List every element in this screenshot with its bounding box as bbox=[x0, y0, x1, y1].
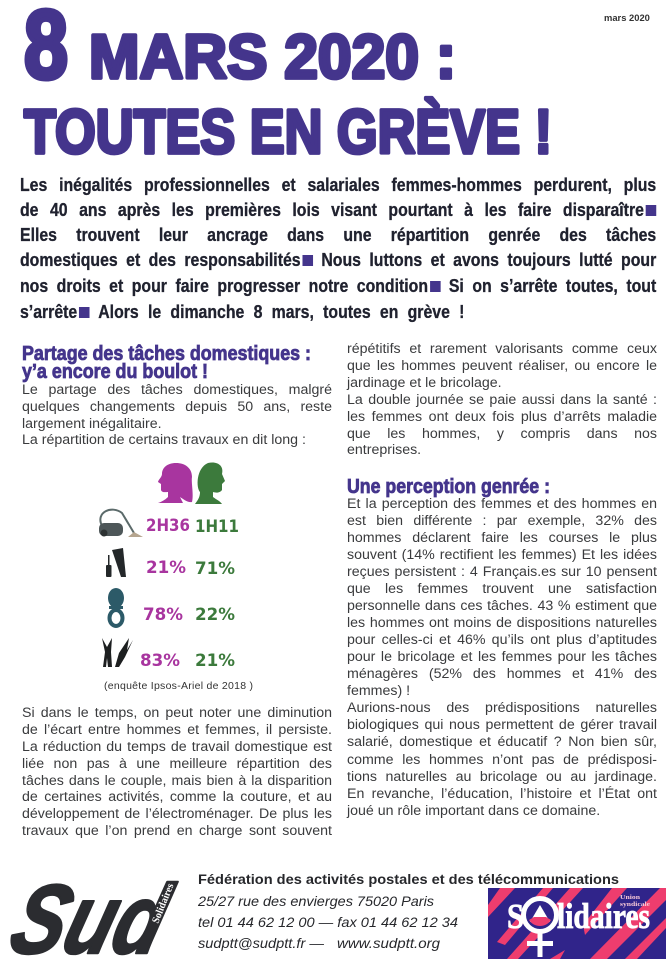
footer: federation contact: tel 01 44 62 12 00 — fax 01 44 62 12 34 bbox=[198, 914, 458, 930]
caption: (enquête Ipsos-Ariel de 2018 ) bbox=[104, 680, 253, 692]
title: MARS 2020 : bbox=[89, 23, 456, 92]
icon: male head bbox=[195, 463, 225, 504]
text block: partage intro: largement inégalitaire. bbox=[22, 416, 162, 432]
text block: une perception genrée: comme les hommes n’ont pas de prédisposi- bbox=[347, 752, 657, 768]
text block: une perception genrée: souvent (14% rectifient les femmes) Et les idées bbox=[347, 547, 657, 563]
text block: une perception genrée: personnelle dans ces tâches. 43 % estiment que bbox=[347, 598, 657, 614]
title bbox=[23, 0, 552, 167]
text block: une perception genrée: pour le bricolage et les femmes pour les tâches bbox=[347, 649, 657, 665]
text block: si dans le temps bbox=[22, 705, 332, 839]
footer: federation contact: www.sudptt.org bbox=[337, 935, 440, 951]
text block: partage intro: La répartition de certains travaux en dit long : bbox=[22, 432, 306, 448]
logo: Solidaires: Union bbox=[620, 894, 640, 901]
row: toilet cleaning values bbox=[143, 605, 235, 624]
text block: si dans le temps: de l’écart entre hommes et femmes, il persiste. bbox=[22, 722, 332, 738]
row: toilet cleaning values: 22% bbox=[195, 605, 235, 624]
row: diy values: 71% bbox=[195, 559, 235, 578]
text block: suite colonne droite: les femmes ont deux fois plus d’arrêts maladie bbox=[347, 409, 657, 425]
text block: une perception genrée: reçues persistent : 4 Français.es sur 10 pensent bbox=[347, 564, 657, 580]
text block: suite colonne droite: que les hommes, y compris dans nos bbox=[347, 426, 657, 442]
text block: suite colonne droite: entreprises. bbox=[347, 442, 421, 458]
logo: Sud: Solidaires bbox=[151, 882, 177, 925]
text block: partage intro: Le partage des tâches domestiques, malgré bbox=[22, 382, 332, 398]
footer: federation contact: 25/27 rue des envierges 75020 Paris bbox=[197, 893, 434, 909]
intro paragraph bbox=[20, 175, 656, 322]
row: laundry values: 83% bbox=[140, 651, 180, 670]
heading: partage des tâches: Partage des tâches domestiques : bbox=[22, 342, 311, 365]
text block: une perception genrée: En revanche, l’éducation, l’histoire et l’État ont bbox=[347, 786, 657, 802]
text block: une perception genrée: pour celles-ci et 46% qu’ils ont plus d’aptitudes bbox=[347, 632, 657, 648]
text block: une perception genrée: Et la perception des femmes et des hommes en bbox=[347, 496, 657, 512]
logo: Solidaires: syndicale bbox=[620, 901, 650, 908]
text block: suite colonne droite: La double journée se paie aussi dans la santé : bbox=[347, 392, 657, 408]
intro paragraph: nos droits et pour faire progresser notre condition Si on s’arrête toutes, tout bbox=[20, 276, 656, 296]
text block: une perception genrée: ménagères (52% des hommes et 41% des bbox=[347, 666, 657, 682]
row: diy values bbox=[146, 558, 235, 578]
row: vacuuming values bbox=[146, 516, 239, 536]
text block: suite colonne droite: que les hommes peuvent réaliser, ou encore le bbox=[347, 358, 657, 374]
text block: une perception genrée: salarié, domestique et éducatif ? Non bien sûr, bbox=[347, 734, 657, 750]
logo: Solidaires: S bbox=[507, 897, 524, 936]
title: TOUTES EN GRÈVE ! bbox=[24, 98, 552, 167]
intro paragraph: Les inégalités professionnelles et salariales femmes-hommes perdurent, plus bbox=[20, 175, 656, 195]
text block: une perception genrée: les hommes ont moins de dispositions naturelles bbox=[347, 615, 657, 631]
row: vacuuming values: 2H36 bbox=[146, 516, 190, 535]
icon: saw and screwdriver bbox=[106, 548, 126, 577]
text block: une perception genrée: est bien différente : par exemple, 32% des bbox=[347, 513, 657, 529]
row: toilet cleaning values: 78% bbox=[143, 605, 183, 624]
text block: suite colonne droite: répétitifs et rarement valorisants comme ceux bbox=[347, 341, 657, 357]
text block: si dans le temps: liée non pas à une meilleure répartition des bbox=[22, 756, 332, 772]
icon: clothes pegs bbox=[102, 638, 133, 667]
footer: federation contact: Fédération des activités postales et des télécommunications bbox=[198, 872, 619, 887]
icon: female head bbox=[158, 463, 193, 503]
text block: si dans le temps: de certaines activités, comme la couture, et au bbox=[22, 789, 332, 805]
text block: si dans le temps: travaux que l’on prend en charge sont souvent bbox=[22, 823, 332, 839]
heading: partage des tâches bbox=[22, 342, 311, 383]
text block: si dans le temps: Si dans le temps, on peut noter une diminution bbox=[22, 705, 332, 721]
row: laundry values: 21% bbox=[195, 651, 235, 670]
text block: suite colonne droite bbox=[346, 341, 657, 458]
date label: mars 2020 bbox=[604, 12, 650, 23]
icon: toilet seat bbox=[108, 588, 124, 626]
logo: Solidaires: lidaires bbox=[557, 896, 650, 936]
infographic: household tasks bbox=[99, 462, 253, 692]
intro paragraph: domestiques et des responsabilités Nous luttons et avons toujours lutté pour bbox=[20, 250, 656, 270]
intro paragraph: de 40 ans après les premières lois visant pourtant à les faire disparaître bbox=[20, 200, 644, 220]
logo: Solidaires bbox=[488, 888, 666, 959]
intro paragraph: Elles trouvent leur ancrage dans une répartition genrée des tâches bbox=[20, 225, 656, 245]
heading: une perception genrée: Une perception genrée : bbox=[347, 475, 550, 498]
text block: une perception genrée: Aurions-nous des prédispositions naturelles bbox=[347, 700, 657, 716]
text block: une perception genrée: tions naturelles au bricolage ou au jardinage. bbox=[347, 769, 657, 785]
text block: une perception genrée: biologiques qui nous permettent de gérer travail bbox=[347, 717, 657, 733]
text block: une perception genrée bbox=[346, 496, 657, 819]
row: laundry values bbox=[140, 651, 235, 670]
heading: partage des tâches: y’a encore du boulot ! bbox=[22, 360, 208, 383]
text block: une perception genrée: femmes) ! bbox=[347, 683, 410, 699]
footer: federation contact bbox=[197, 872, 619, 951]
intro paragraph: s’arrête Alors le dimanche 8 mars, toutes en grève ! bbox=[20, 302, 464, 322]
footer: federation contact: sudptt@sudptt.fr — bbox=[198, 935, 325, 951]
text block: une perception genrée: hommes déclarent faire les courses le plus bbox=[347, 530, 657, 546]
text block: si dans le temps: La réduction du temps de travail domestique est bbox=[22, 739, 332, 755]
text block: suite colonne droite: jardinage et le bricolage. bbox=[347, 375, 502, 391]
text block: une perception genrée: joué un rôle important dans ce domaine. bbox=[347, 803, 600, 819]
row: vacuuming values: 1H11 bbox=[195, 517, 239, 536]
icon: vacuum cleaner bbox=[99, 510, 143, 537]
text block: si dans le temps: tâches dans le couple, mais bien à la disparition bbox=[22, 773, 332, 789]
row: diy values: 21% bbox=[146, 558, 186, 577]
text block: partage intro: quelques changements depuis 50 ans, reste bbox=[22, 399, 332, 415]
text block: partage intro bbox=[22, 382, 332, 448]
text block: si dans le temps: développement de l’électroménager. De plus les bbox=[22, 806, 332, 822]
text block: une perception genrée: que les femmes trouvent une satisfaction bbox=[347, 581, 657, 597]
